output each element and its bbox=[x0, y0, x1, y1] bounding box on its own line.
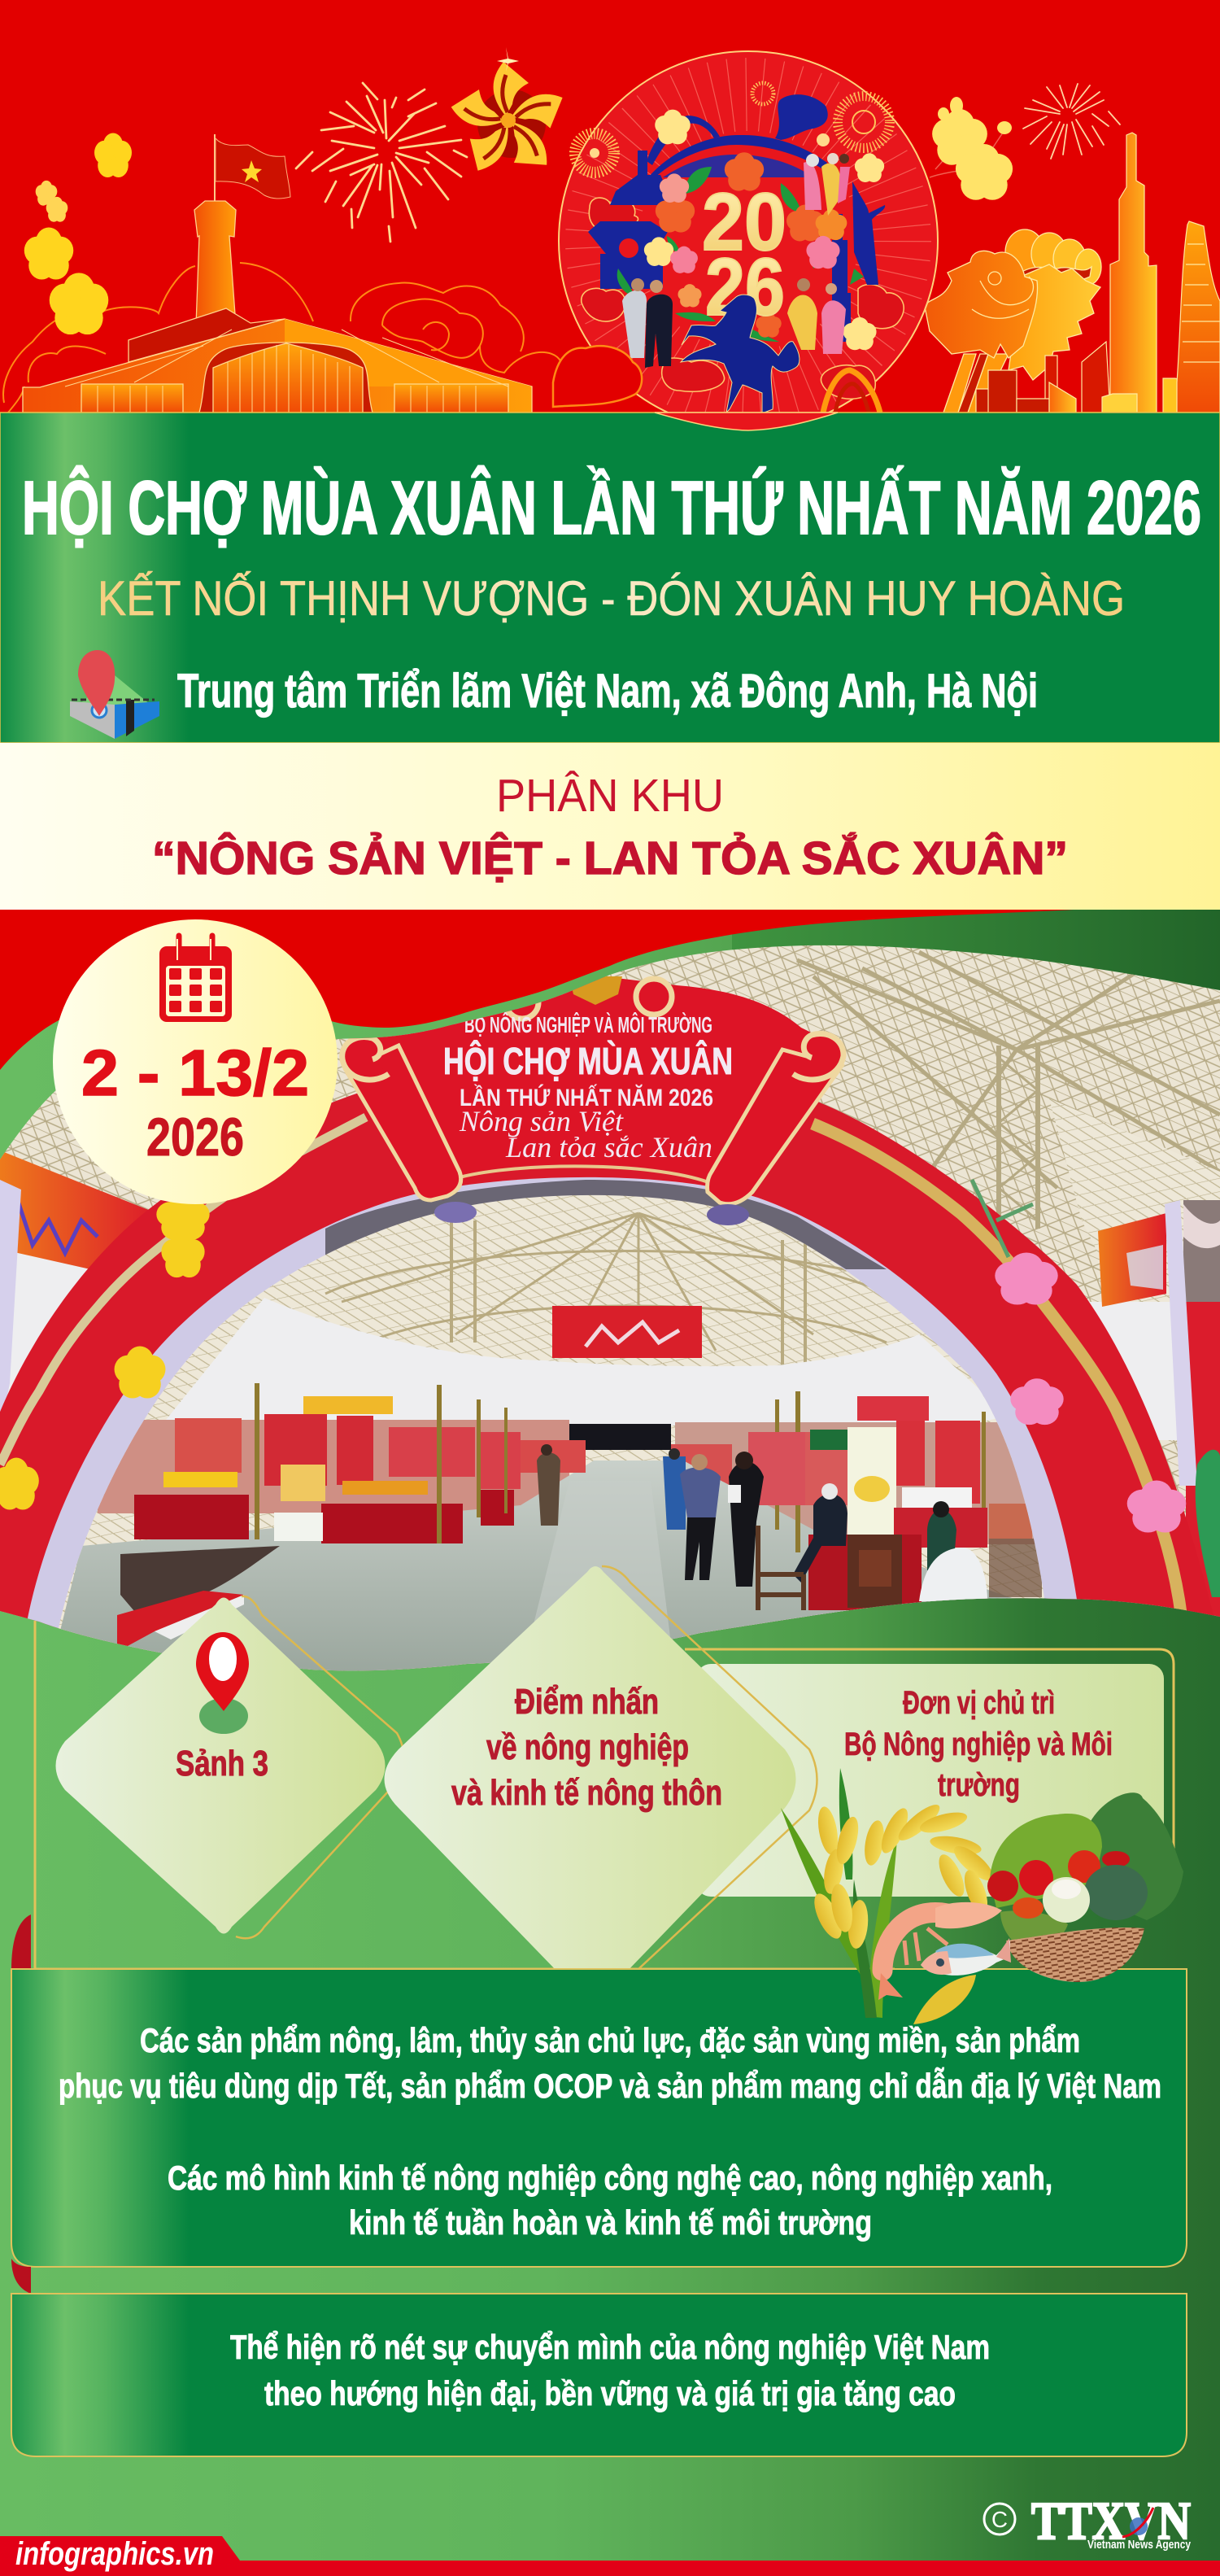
cloud outlines left bbox=[3, 263, 561, 413]
emblem year 20 26: 26 bbox=[705, 242, 785, 333]
central hanging banner bbox=[552, 1306, 702, 1358]
stall back tone bbox=[98, 1420, 569, 1513]
arch gold stripe left bbox=[0, 1117, 366, 1465]
rice leaves bbox=[781, 1768, 897, 2018]
emblem year 20 26: 20 bbox=[702, 177, 786, 268]
arch red body bbox=[0, 1090, 1220, 1676]
highlight text: và kinh tế nông thôn bbox=[451, 1773, 722, 1813]
emblem rays bbox=[602, 94, 895, 387]
Bitexco tower bbox=[852, 181, 885, 285]
lion mane bbox=[1009, 264, 1100, 380]
blue horse bbox=[681, 295, 800, 413]
organiser text: Đơn vị chủ trì bbox=[903, 1685, 1055, 1721]
exhibition hall bbox=[23, 319, 532, 413]
agency subtitle: Vietnam News Agency bbox=[1087, 2538, 1192, 2552]
flag tower small bbox=[610, 151, 670, 205]
highlight text bbox=[451, 1682, 722, 1813]
sign text: BỘ NÔNG NGHIỆP VÀ MÔI TRƯỜNG bbox=[464, 1011, 712, 1037]
arch decorations: blossoms bbox=[0, 1180, 1186, 1533]
agency name: TTXVN bbox=[1031, 2491, 1191, 2551]
far dark band bbox=[569, 1424, 671, 1450]
copyright mark bbox=[984, 2504, 1015, 2535]
cream zone banner bbox=[0, 743, 1220, 910]
scroll curls bbox=[342, 979, 843, 1080]
sign text: Lan tỏa sắc Xuân bbox=[505, 1131, 712, 1164]
page background: red bbox=[0, 0, 1220, 415]
transformation text: Thể hiện rõ nét sự chuyển mình của nông nghiệp Việt Nam bbox=[230, 2328, 990, 2366]
blossom branch right bbox=[930, 97, 1013, 200]
scroll roll left bbox=[346, 1046, 461, 1200]
date range: 2 - 13/2 bbox=[81, 1037, 309, 1109]
highlight text: Điểm nhấn bbox=[515, 1682, 659, 1722]
lion crest bumps bbox=[1005, 229, 1044, 275]
green title banner bbox=[0, 413, 1220, 743]
roof truss bbox=[0, 936, 1220, 1668]
photo: fair entrance arch bbox=[0, 936, 1220, 1684]
red tab upper bbox=[11, 1915, 31, 1969]
lion face bbox=[925, 251, 1038, 358]
foreground red cloud over circle bbox=[553, 346, 642, 407]
icon: location pin bbox=[196, 1632, 249, 1734]
blue bridge and dragon bbox=[588, 94, 885, 342]
small gold arches bbox=[823, 370, 880, 413]
agency logo bbox=[984, 2491, 1192, 2552]
zone label: PHÂN KHU bbox=[496, 770, 724, 822]
right wall, banner and pillar bbox=[1089, 1200, 1220, 1617]
fair visitors bbox=[537, 1444, 987, 1610]
zone name: “NÔNG SẢN VIỆT - LAN TỎA SẮC XUÂN” bbox=[152, 832, 1068, 884]
hall label: Sảnh 3 bbox=[176, 1744, 268, 1784]
rice grains bbox=[808, 1800, 998, 2024]
light info panel bbox=[696, 1664, 1164, 1897]
vegetables bbox=[987, 1792, 1183, 1948]
landmark tower bbox=[832, 214, 851, 342]
icon: map pin bbox=[70, 650, 159, 739]
diamond: highlight bbox=[384, 1566, 817, 2004]
scroll roll right bbox=[708, 1050, 842, 1204]
hall interior bbox=[49, 1180, 1074, 1684]
emblem year 20 26 bbox=[702, 177, 786, 333]
white balcony wall bbox=[163, 1298, 1009, 1427]
star flower emblem bbox=[448, 47, 570, 180]
far stall rows bbox=[671, 1444, 732, 1485]
lion dragon head bbox=[925, 229, 1101, 413]
red tab lower bbox=[11, 2259, 31, 2294]
organiser text: trường bbox=[938, 1767, 1020, 1803]
organiser text: Bộ Nông nghiệp và Môi bbox=[844, 1727, 1113, 1762]
scroll sign bbox=[342, 972, 846, 1225]
sign text: Nông sản Việt bbox=[459, 1105, 624, 1137]
sign text: LẦN THỨ NHẤT NĂM 2026 bbox=[460, 1084, 713, 1111]
products text bbox=[59, 2021, 1161, 2242]
sign text: HỘI CHỢ MÙA XUÂN bbox=[443, 1040, 733, 1082]
agency logo: C bbox=[991, 2507, 1008, 2532]
source tab bbox=[0, 2536, 240, 2572]
basket bbox=[1006, 1928, 1144, 1982]
year emblem circle bbox=[559, 51, 938, 430]
lavender supports bbox=[434, 1202, 477, 1223]
emblem flowers bbox=[644, 110, 884, 350]
emblem leaves bbox=[617, 167, 864, 342]
red wave bbox=[0, 910, 1074, 1070]
crown emblem bbox=[569, 976, 622, 1005]
icon: calendar bbox=[159, 936, 232, 1022]
highlight text: về nông nghiệp bbox=[486, 1727, 689, 1767]
arch lavender band bbox=[24, 1177, 1086, 1676]
blossom flowers left bbox=[24, 133, 132, 334]
year: 2026 bbox=[146, 1107, 244, 1167]
gold frame bbox=[35, 1621, 1174, 1969]
panel: products bbox=[11, 1969, 1187, 2267]
right roof lighter area bbox=[1049, 1098, 1220, 1302]
fish bbox=[921, 1938, 1011, 1976]
lower green background bbox=[0, 910, 1220, 2576]
header illustration bbox=[3, 47, 1220, 430]
lower edge of year circle overlapping banner bbox=[655, 413, 838, 430]
left stall tables and goods bbox=[134, 1465, 514, 1543]
panel: transformation bbox=[11, 2294, 1187, 2456]
Ho Chi Minh skyline bbox=[976, 133, 1220, 413]
main truss beams bbox=[797, 952, 1220, 1229]
right stalls bbox=[748, 1396, 1042, 1610]
transformation text: theo hướng hiện đại, bền vững và giá trị gia tăng cao bbox=[264, 2374, 956, 2412]
footer red bar bbox=[0, 2561, 1220, 2576]
date badge bbox=[53, 919, 338, 1204]
sign text bbox=[443, 1011, 733, 1164]
arch gold stripe right bbox=[813, 1124, 1182, 1619]
flag tower bbox=[129, 201, 285, 362]
red cloud shapes bbox=[582, 198, 904, 399]
shrimp bbox=[878, 1902, 1002, 2000]
dark green top-right wave bbox=[732, 910, 1220, 1009]
floor bbox=[49, 1460, 1074, 1676]
firework suns bbox=[575, 83, 890, 172]
firework right bbox=[1023, 84, 1120, 159]
temple bbox=[588, 221, 668, 289]
dark net decoration bbox=[120, 1546, 280, 1611]
source label: infographics.vn bbox=[15, 2536, 214, 2572]
organiser text bbox=[844, 1685, 1113, 1803]
left stall back panels bbox=[175, 1396, 586, 1489]
products text: kinh tế tuần hoàn và kinh tế môi trường bbox=[349, 2203, 872, 2242]
flag and pole bbox=[215, 134, 290, 203]
firework left bbox=[296, 83, 467, 242]
bamboo posts bbox=[255, 1383, 986, 1552]
transformation text bbox=[230, 2328, 990, 2412]
diamond: hall bbox=[55, 1596, 403, 1938]
emblem people bbox=[622, 153, 850, 368]
left wall and banner bbox=[0, 1152, 148, 1412]
dome radial ribs bbox=[325, 1213, 919, 1367]
illustration: rice, seafood and vegetable basket bbox=[781, 1768, 1183, 2024]
